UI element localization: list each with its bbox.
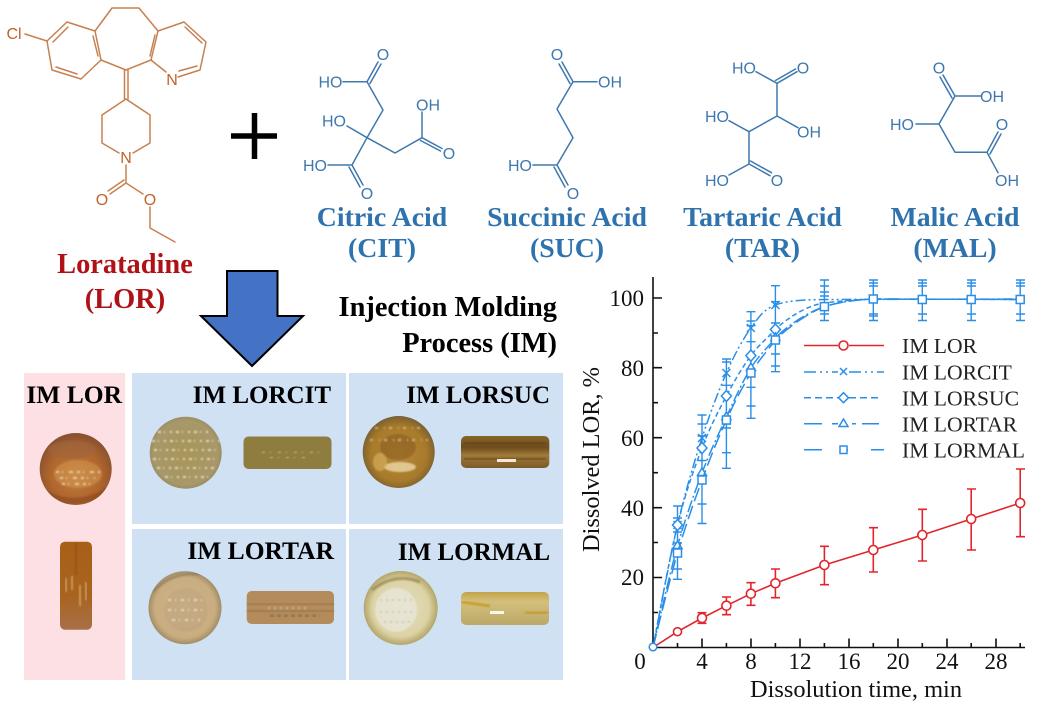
x tick labels: 16 (838, 649, 860, 674)
citric acid structure: OH (416, 98, 440, 114)
tartaric acid label (683, 202, 842, 264)
heading: IM LOR: IM LOR (26, 380, 123, 409)
origin marker (649, 643, 657, 651)
heading: IM LORSUC: IM LORSUC (406, 382, 550, 409)
tablet: LORCIT disc (150, 417, 222, 489)
succinic acid structure: O (551, 47, 563, 64)
citric acid structure: O (361, 186, 373, 203)
x tick labels: 28 (984, 649, 1008, 674)
tartaric acid label: Tartaric Acid (683, 202, 842, 233)
malic acid structure: OH (995, 173, 1019, 190)
loratadine structure: N (166, 72, 178, 89)
x tick labels: 8 (745, 649, 757, 674)
loratadine structure: N (120, 150, 132, 167)
y tick labels (610, 286, 644, 590)
panel: IM LORMAL (349, 529, 563, 680)
citric acid label: Citric Acid (317, 202, 448, 233)
chart axes (653, 277, 1025, 648)
bar: LORMAL (461, 592, 549, 625)
malic acid label: Malic Acid (891, 202, 1020, 233)
loratadine structure: O (144, 192, 156, 209)
series: IM LORSUC curve (653, 299, 1020, 648)
panel: IM LORTAR (132, 529, 346, 680)
citric acid structure: O (443, 146, 455, 163)
series: IM LORTAR curve (653, 299, 1020, 648)
tartaric acid structure: HO (705, 173, 729, 190)
succinic acid structure: OH (598, 74, 622, 92)
tartaric acid structure: HO (705, 109, 729, 126)
succinic acid label (487, 202, 647, 264)
bar: LORSUC (461, 436, 549, 468)
loratadine label: Loratadine (57, 249, 193, 280)
malic acid structure (890, 60, 1019, 190)
tablet: LOR disc (40, 433, 112, 505)
citric acid structure (303, 47, 455, 203)
tartaric acid structure: O (771, 173, 783, 190)
succinic acid label: Succinic Acid (487, 202, 647, 233)
bar: LORCIT (244, 436, 332, 469)
tablet: LORTAR disc (148, 571, 222, 644)
malic acid structure: O (996, 117, 1008, 134)
blue error bars (673, 280, 1025, 579)
succinic acid structure: HO (508, 158, 532, 175)
panel: IM LORSUC (349, 373, 563, 524)
tartaric acid structure: HO (732, 60, 756, 78)
loratadine label (57, 249, 193, 315)
y tick labels: 60 (621, 426, 644, 451)
x tick labels: 24 (936, 649, 959, 674)
y axis title: Dissolved LOR, % (578, 367, 605, 552)
legend: IM LORMAL (902, 438, 1025, 462)
series: IM LORMAL curve (653, 295, 1024, 648)
malic acid structure: HO (890, 117, 914, 134)
heading: IM LORCIT: IM LORCIT (193, 382, 331, 409)
tartaric acid label: (TAR) (725, 233, 800, 264)
x tick labels (634, 649, 1008, 674)
series: IM LOR curve (653, 469, 1025, 648)
x tick labels: 12 (788, 649, 812, 674)
y tick labels: 80 (621, 356, 644, 381)
bar: LORTAR (247, 591, 334, 624)
legend: IM LORTAR (902, 412, 1018, 436)
y tick labels: 40 (621, 496, 644, 521)
x tick labels: 4 (696, 649, 708, 674)
citric acid structure: HO (303, 158, 327, 175)
loratadine structure: O (96, 192, 108, 209)
loratadine structure (6, 8, 206, 242)
dissolution chart (578, 277, 1025, 703)
y tick labels: 100 (610, 286, 644, 311)
loratadine structure: Cl (6, 26, 22, 43)
bar: LOR (60, 542, 92, 630)
citric acid structure: HO (318, 74, 342, 92)
citric acid structure: O (377, 47, 389, 64)
tablet: LORMAL disc (364, 571, 438, 645)
succinic acid structure: O (567, 186, 579, 203)
loratadine label: (LOR) (85, 284, 165, 315)
succinic acid label: (SUC) (530, 233, 604, 264)
plus sign (231, 113, 277, 159)
succinic acid structure (508, 47, 622, 203)
panel: IM LORCIT (132, 373, 346, 524)
heading: IM LORTAR: IM LORTAR (187, 536, 335, 565)
heading: IM LORMAL: IM LORMAL (398, 539, 550, 566)
tartaric acid structure: O (797, 60, 809, 78)
legend (804, 334, 1025, 462)
y tick labels: 20 (621, 565, 644, 590)
injection molding heading (339, 292, 557, 359)
series: IM LORCIT curve (653, 299, 1020, 648)
citric acid label: (CIT) (348, 233, 416, 264)
malic acid structure: OH (980, 89, 1004, 106)
tablet: LORSUC disc (363, 416, 435, 488)
x tick labels: 20 (886, 649, 910, 674)
citric acid structure: HO (322, 114, 346, 130)
tartaric acid structure: OH (797, 124, 821, 142)
malic acid structure: O (933, 60, 945, 78)
legend: IM LORCIT (902, 360, 1012, 384)
tartaric acid structure (705, 60, 821, 190)
legend: IM LORSUC (902, 386, 1019, 410)
injection molding heading: Injection Molding (339, 292, 557, 323)
panel: IM LOR (24, 373, 125, 680)
malic acid label (891, 202, 1020, 264)
malic acid label: (MAL) (913, 233, 997, 264)
x axis title: Dissolution time, min (750, 676, 962, 703)
injection molding heading: Process (IM) (402, 328, 557, 359)
process arrow (201, 271, 303, 366)
legend: IM LOR (902, 334, 978, 358)
x tick labels: 0 (634, 649, 646, 674)
citric acid label (317, 202, 448, 264)
